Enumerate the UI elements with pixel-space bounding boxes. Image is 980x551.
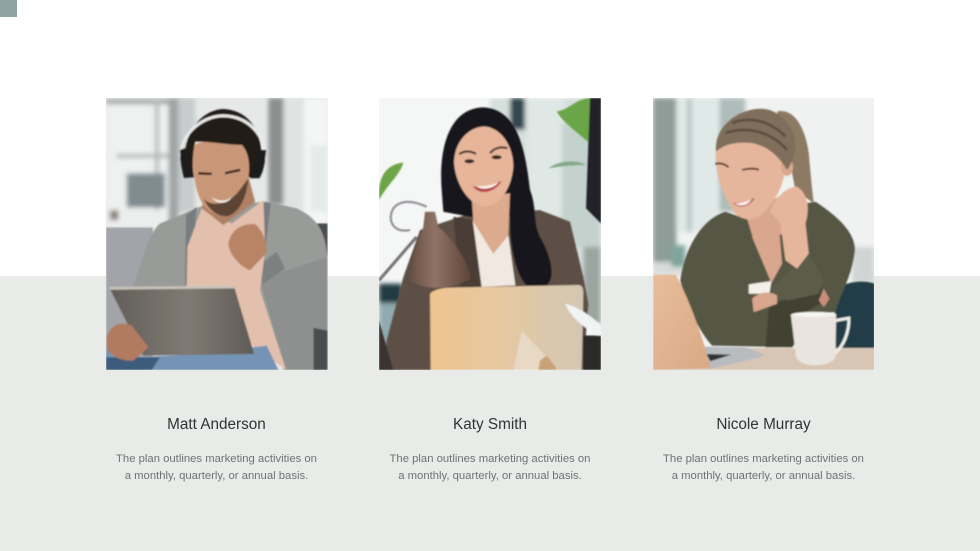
blouse bbox=[473, 220, 515, 287]
jeans bbox=[106, 346, 278, 370]
photo: Matt Anderson bbox=[106, 98, 328, 370]
description: a monthly, quarterly, or annual basis. bbox=[672, 470, 855, 482]
laptop bbox=[430, 285, 583, 370]
shirt bbox=[187, 200, 286, 370]
profile: Katy Smith bbox=[390, 416, 590, 482]
name: Matt Anderson bbox=[167, 416, 266, 433]
mug bbox=[833, 318, 848, 354]
lamp arm bbox=[391, 202, 427, 231]
hair bbox=[185, 109, 261, 177]
neck bbox=[472, 193, 510, 254]
profile: Matt Anderson bbox=[116, 416, 317, 482]
photo: Katy Smith bbox=[379, 98, 601, 370]
ponytail bbox=[777, 111, 813, 203]
hair bbox=[715, 109, 795, 170]
description: The plan outlines marketing activities on bbox=[663, 452, 864, 464]
description: a monthly, quarterly, or annual basis. bbox=[125, 470, 308, 482]
laptop base bbox=[704, 347, 763, 369]
fist bbox=[228, 224, 267, 270]
corner accent square bbox=[0, 0, 17, 17]
face bbox=[715, 139, 785, 219]
description: The plan outlines marketing activities on bbox=[116, 452, 317, 464]
chest and top bbox=[752, 223, 782, 283]
description bbox=[663, 452, 864, 482]
laptop lid bbox=[652, 275, 710, 370]
chair bbox=[832, 282, 874, 370]
headphones bbox=[181, 116, 265, 160]
hand bbox=[107, 324, 148, 361]
description bbox=[390, 452, 590, 482]
lower background band bbox=[0, 276, 980, 551]
paper bbox=[565, 304, 601, 337]
face bbox=[454, 126, 513, 207]
description: a monthly, quarterly, or annual basis. bbox=[398, 470, 582, 482]
name: Nicole Murray bbox=[716, 416, 811, 433]
neck bbox=[202, 177, 255, 225]
photo: Nicole Murray bbox=[653, 98, 874, 370]
hand and arm bbox=[770, 187, 808, 269]
description: The plan outlines marketing activities on bbox=[390, 452, 590, 464]
lamp bbox=[411, 212, 471, 288]
head bbox=[193, 140, 250, 215]
hair back bbox=[441, 107, 552, 285]
neck bbox=[745, 197, 785, 240]
shirt bbox=[680, 202, 854, 347]
desk bbox=[652, 348, 874, 370]
dark coat bbox=[586, 98, 601, 223]
description bbox=[116, 452, 317, 482]
sofa bbox=[106, 227, 153, 370]
cardigan bbox=[133, 202, 328, 370]
profile: Nicole Murray bbox=[663, 416, 864, 482]
tablet bbox=[109, 286, 254, 356]
plants bbox=[557, 98, 590, 143]
name: Katy Smith bbox=[453, 416, 527, 433]
jacket bbox=[386, 210, 588, 370]
